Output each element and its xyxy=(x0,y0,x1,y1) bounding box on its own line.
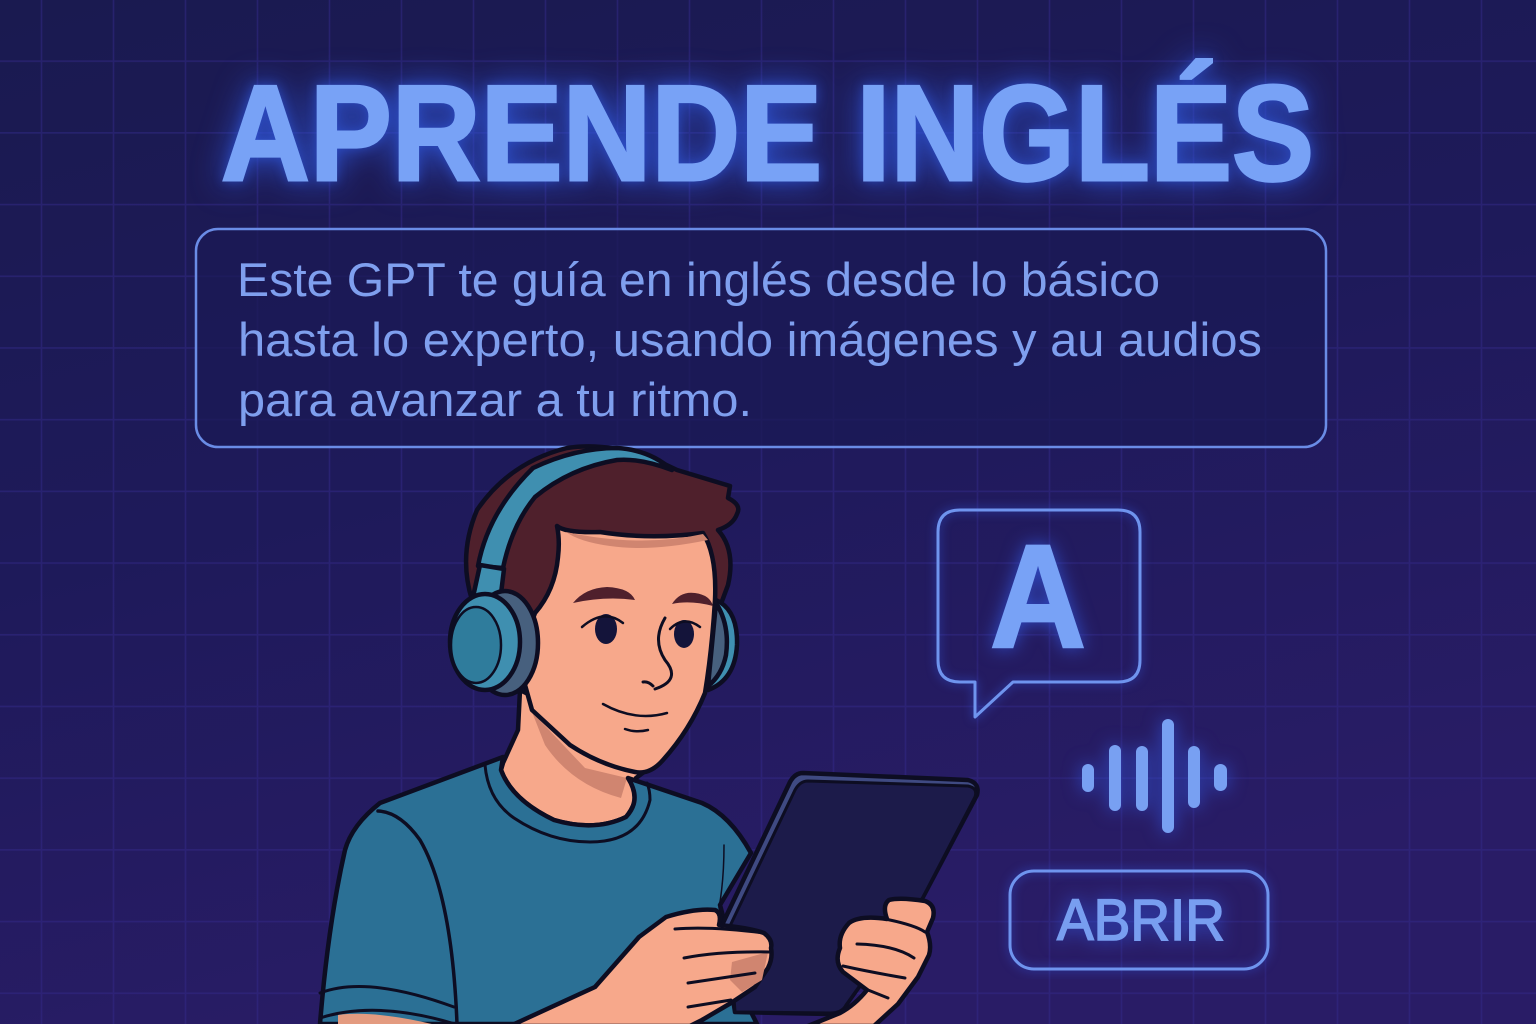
panel: description xyxy=(196,229,1326,447)
illustration: person with headphones and tablet xyxy=(320,446,978,1024)
shirt xyxy=(320,757,757,1024)
letter A: A xyxy=(990,515,1086,679)
icon: audio waveform xyxy=(1082,719,1227,833)
left hand shadow xyxy=(730,952,768,992)
hair fringe shadow xyxy=(566,532,708,548)
right hand finger lines xyxy=(843,919,925,998)
description text: para avanzar a tu ritmo. xyxy=(238,373,752,426)
right eye xyxy=(670,620,700,648)
left ear cup xyxy=(450,591,538,695)
nose xyxy=(643,618,672,689)
face xyxy=(518,526,715,772)
icon: speech bubble with letter A xyxy=(938,510,1140,717)
sleeve cuff xyxy=(320,987,455,1024)
title: APRENDE INGLÉS xyxy=(221,57,1314,209)
left eye xyxy=(582,614,623,644)
mouth xyxy=(603,704,667,731)
button: abrir xyxy=(1010,871,1268,969)
description text xyxy=(237,253,1262,426)
left hand xyxy=(510,910,772,1024)
sleeve seam xyxy=(378,811,457,1024)
arm below cuff xyxy=(338,1014,440,1024)
button: abrir: ABRIR xyxy=(1057,888,1225,953)
right ear cup xyxy=(708,600,737,690)
headband slider xyxy=(473,565,504,602)
tablet screen xyxy=(729,781,976,1013)
back hair xyxy=(466,446,738,620)
shirt collar xyxy=(485,765,650,842)
neck shadow xyxy=(532,712,627,798)
description text: Este GPT te guía en inglés desde lo básico xyxy=(237,253,1160,306)
right hand xyxy=(808,899,934,1024)
shirt fold xyxy=(719,845,724,908)
headband xyxy=(478,448,672,568)
description text: hasta lo experto, usando imágenes y au audios xyxy=(238,313,1262,366)
neck xyxy=(501,690,660,825)
left hand finger lines xyxy=(675,928,770,1007)
tablet xyxy=(722,773,978,1014)
eyebrows xyxy=(573,587,713,606)
